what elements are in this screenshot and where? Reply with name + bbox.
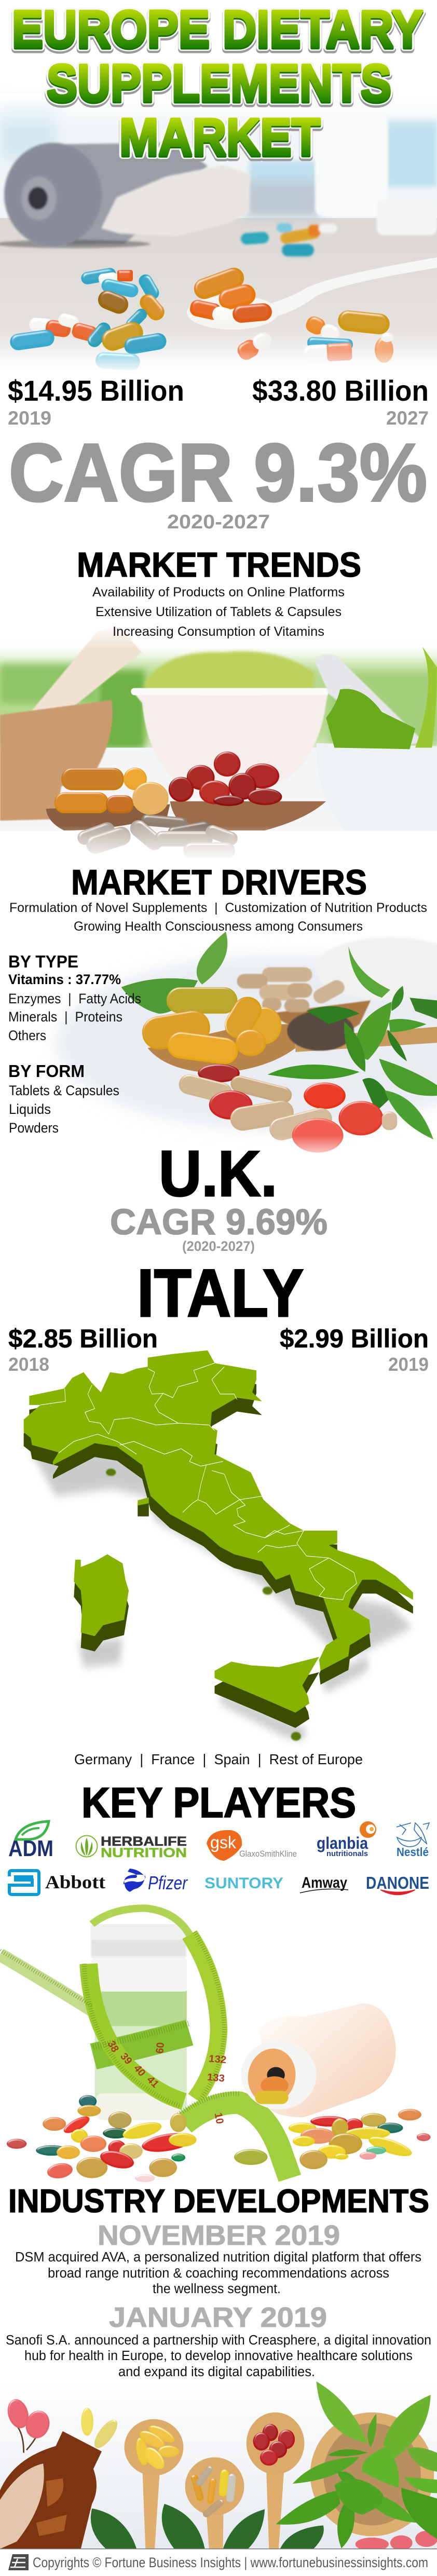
wooden spoon 2 with mixed capsules bbox=[185, 2457, 244, 2549]
basil leaves bbox=[268, 946, 437, 1139]
development: January 2019: and expand its digital capabilities. bbox=[118, 2365, 315, 2379]
wooden spoon with golden softgels bbox=[140, 987, 437, 1073]
development: November 2019: broad range nutrition & coaching recommendations across bbox=[48, 2266, 389, 2281]
segment list: by type: Enzymes | Fatty Acids bbox=[8, 991, 141, 1006]
heading: market drivers: MARKET DRIVERS bbox=[71, 863, 367, 902]
wooden pestle bbox=[31, 625, 142, 712]
red softgels on spoon bbox=[169, 752, 326, 830]
segment list: by type: BY TYPE bbox=[8, 952, 78, 971]
market size values: 2027 bbox=[386, 407, 429, 429]
spoon with softgels bbox=[187, 257, 437, 330]
amber bottle bbox=[0, 2431, 102, 2549]
capsules, right group bbox=[235, 309, 393, 363]
tape numbers: 10 bbox=[212, 2112, 226, 2125]
logo: GSK: GlaxoSmithKline bbox=[239, 1849, 297, 1859]
white bowl bbox=[315, 937, 437, 1000]
white mortar with herbs bbox=[131, 651, 329, 786]
logo: Nestle bbox=[397, 1823, 429, 1859]
segment list: by form: BY FORM bbox=[8, 1061, 85, 1081]
market size values: $14.95 Billion bbox=[8, 374, 184, 407]
segment list: by type: Others bbox=[8, 1028, 46, 1043]
capsules, background bbox=[240, 223, 337, 256]
wooden spoon 3 with red softgels bbox=[247, 2413, 304, 2549]
segment list: by type bbox=[8, 952, 141, 1043]
market size values bbox=[8, 374, 429, 429]
dried herbs bbox=[287, 1011, 354, 1051]
logo: Herbalife Nutrition bbox=[76, 1834, 187, 1860]
mainland top bbox=[24, 1351, 413, 1671]
segment list: by type: Vitamins : 37.77% bbox=[8, 972, 121, 987]
list: market drivers bbox=[9, 901, 427, 934]
segment list: by form: Powders bbox=[9, 1120, 59, 1136]
segment list: by form bbox=[8, 1061, 119, 1136]
tape numbers: 41 bbox=[144, 2074, 161, 2090]
logo: Herbalife Nutrition: NUTRITION bbox=[101, 1846, 187, 1860]
Italy callout: 2019 bbox=[388, 1354, 429, 1375]
list: market drivers: Formulation of Novel Supplements | Customization of Nutrition Products bbox=[9, 901, 427, 915]
title: MARKET bbox=[119, 108, 320, 166]
Italy callout bbox=[8, 1255, 429, 1375]
towel bbox=[101, 165, 250, 236]
list: market trends: Extensive Utilization of Tablets & Capsules bbox=[95, 605, 342, 619]
wooden spoon 1 with yellow tablets bbox=[125, 2419, 183, 2549]
Italy callout: 2018 bbox=[8, 1354, 49, 1375]
logo: Glanbia bbox=[317, 1821, 376, 1858]
tape numbers: 133 bbox=[207, 2071, 225, 2084]
title: MARKET bbox=[119, 108, 320, 167]
development: January 2019 bbox=[6, 2302, 431, 2379]
list: market drivers: Growing Health Consciousness among Consumers bbox=[74, 919, 363, 934]
back leaves bbox=[121, 932, 227, 1014]
logo: Abbott bbox=[9, 1871, 105, 1894]
hero photo: dumbbell, towel, capsules and spoon bbox=[0, 93, 437, 374]
berries and yellow pills bbox=[5, 2397, 121, 2453]
development: November 2019: DSM acquired AVA, a personalized nutrition digital platform that offers bbox=[15, 2250, 421, 2265]
logo: Herbalife Nutrition: HERBALIFE bbox=[101, 1834, 187, 1849]
logo: Amway: Amway bbox=[302, 1874, 347, 1891]
measuring tape bbox=[0, 1908, 290, 2178]
footer logo bbox=[8, 2554, 29, 2570]
logo: Glanbia: glanbia bbox=[317, 1834, 368, 1852]
CAGR callout: 2020-2027 bbox=[167, 511, 270, 533]
tape numbers: 60 bbox=[154, 2042, 167, 2054]
amber softgels on spoon bbox=[46, 768, 170, 830]
tape numbers: 132 bbox=[208, 2053, 227, 2066]
other countries list: Germany | France | Spain | Rest of Europe bbox=[74, 1751, 363, 1767]
logo: ADM: ADM bbox=[8, 1836, 53, 1861]
tipped bottle bbox=[235, 2003, 396, 2117]
white pestle bbox=[315, 654, 424, 747]
U.K. callout: U.K. bbox=[159, 1138, 277, 1210]
tape numbers: 38 bbox=[105, 2039, 121, 2054]
scattered pills bbox=[7, 2095, 431, 2182]
logo: Pfizer bbox=[124, 1869, 188, 1893]
Sardinia bbox=[74, 1554, 129, 1652]
market size values: 2019 bbox=[8, 407, 51, 429]
list: market trends: Increasing Consumption of Vitamins bbox=[113, 624, 324, 639]
white bowl and herbs bbox=[316, 646, 437, 830]
tan capsules bbox=[75, 814, 240, 859]
development: January 2019: Sanofi S.A. announced a partnership with Creasphere, a digital innovation bbox=[6, 2333, 431, 2348]
Italy callout: ITALY bbox=[137, 1255, 304, 1331]
heading: market trends: MARKET TRENDS bbox=[77, 546, 361, 584]
photo: amber bottle, wooden spoons and basil bbox=[0, 2380, 437, 2551]
logo: Nestle: Nestlé bbox=[397, 1845, 429, 1859]
Italy map bbox=[24, 1351, 413, 1741]
green background bbox=[0, 661, 437, 749]
development: January 2019: hub for health in Europe, to develop innovative healthcare solutions bbox=[24, 2349, 413, 2363]
title: MARKET bbox=[119, 111, 320, 169]
Italy callout: $2.99 Billion bbox=[280, 1324, 429, 1353]
title: MARKET bbox=[119, 110, 320, 168]
tape tick marks bbox=[0, 1932, 240, 2115]
U.K. callout: CAGR 9.69% bbox=[110, 1202, 327, 1242]
title: SUPPLEMENTS bbox=[47, 54, 391, 112]
list: market trends bbox=[92, 585, 345, 639]
footer rule bbox=[0, 2548, 437, 2550]
U.K. callout bbox=[110, 1138, 327, 1254]
small islands bbox=[106, 1469, 301, 1741]
logo: Suntory: SUNTORY bbox=[204, 1875, 283, 1892]
wooden bowl bbox=[310, 2413, 437, 2551]
logo: Abbott: Abbott bbox=[45, 1872, 105, 1892]
title: SUPPLEMENTS bbox=[47, 57, 391, 115]
Elba bbox=[138, 1497, 149, 1517]
tape numbers: 40 bbox=[131, 2063, 148, 2079]
tape numbers bbox=[105, 2039, 227, 2125]
logo: Glanbia: nutritionals bbox=[326, 1849, 368, 1858]
development: November 2019: NOVEMBER 2019 bbox=[98, 2220, 340, 2251]
title bbox=[12, 0, 423, 169]
list: market trends: Availability of Products on Online Platforms bbox=[92, 585, 345, 599]
dumbbell bbox=[0, 143, 208, 248]
title: SUPPLEMENTS bbox=[47, 54, 391, 113]
market size values: $33.80 Billion bbox=[252, 374, 429, 407]
tape numbers: 39 bbox=[118, 2051, 134, 2067]
U.K. callout: (2020-2027) bbox=[182, 1238, 255, 1254]
heading: key players: KEY PLAYERS bbox=[81, 1779, 356, 1827]
development: January 2019: JANUARY 2019 bbox=[109, 2302, 327, 2333]
segment list: by form: Liquids bbox=[9, 1101, 51, 1117]
upright bottle bbox=[91, 1924, 187, 2120]
mainland side bbox=[24, 1364, 413, 1685]
basil leaves bbox=[276, 2381, 437, 2548]
wooden mortar bbox=[0, 700, 113, 821]
logo: GSK: gsk bbox=[210, 1833, 236, 1852]
map shadow bbox=[29, 1449, 413, 1740]
photo: supplement bottles, measuring tape and pills bbox=[0, 1908, 431, 2182]
Sicily bbox=[214, 1657, 319, 1728]
logo: ADM bbox=[8, 1821, 53, 1861]
bottom capsules and red softgels bbox=[176, 1064, 397, 1153]
segment list: by form: Tablets & Capsules bbox=[9, 1083, 119, 1098]
photo: mortars, herbs and softgels bbox=[0, 623, 437, 862]
logo: GSK bbox=[207, 1830, 297, 1861]
development: November 2019 bbox=[15, 2220, 421, 2296]
photo: golden softgels, capsules and basil bbox=[0, 932, 437, 1162]
dark leaves bbox=[91, 2504, 324, 2549]
white bottle and lid bbox=[315, 115, 437, 235]
segment list: by type: Minerals | Proteins bbox=[8, 1009, 122, 1025]
regional borders bbox=[40, 1363, 357, 1600]
Italy callout: $2.85 Billion bbox=[8, 1324, 158, 1353]
title: SUPPLEMENTS bbox=[47, 56, 391, 114]
tan capsules on spoon bbox=[237, 967, 371, 1038]
logo: Pfizer: Pfizer bbox=[148, 1872, 188, 1893]
capsules, left group bbox=[9, 267, 168, 371]
development: November 2019: the wellness segment. bbox=[153, 2282, 281, 2296]
